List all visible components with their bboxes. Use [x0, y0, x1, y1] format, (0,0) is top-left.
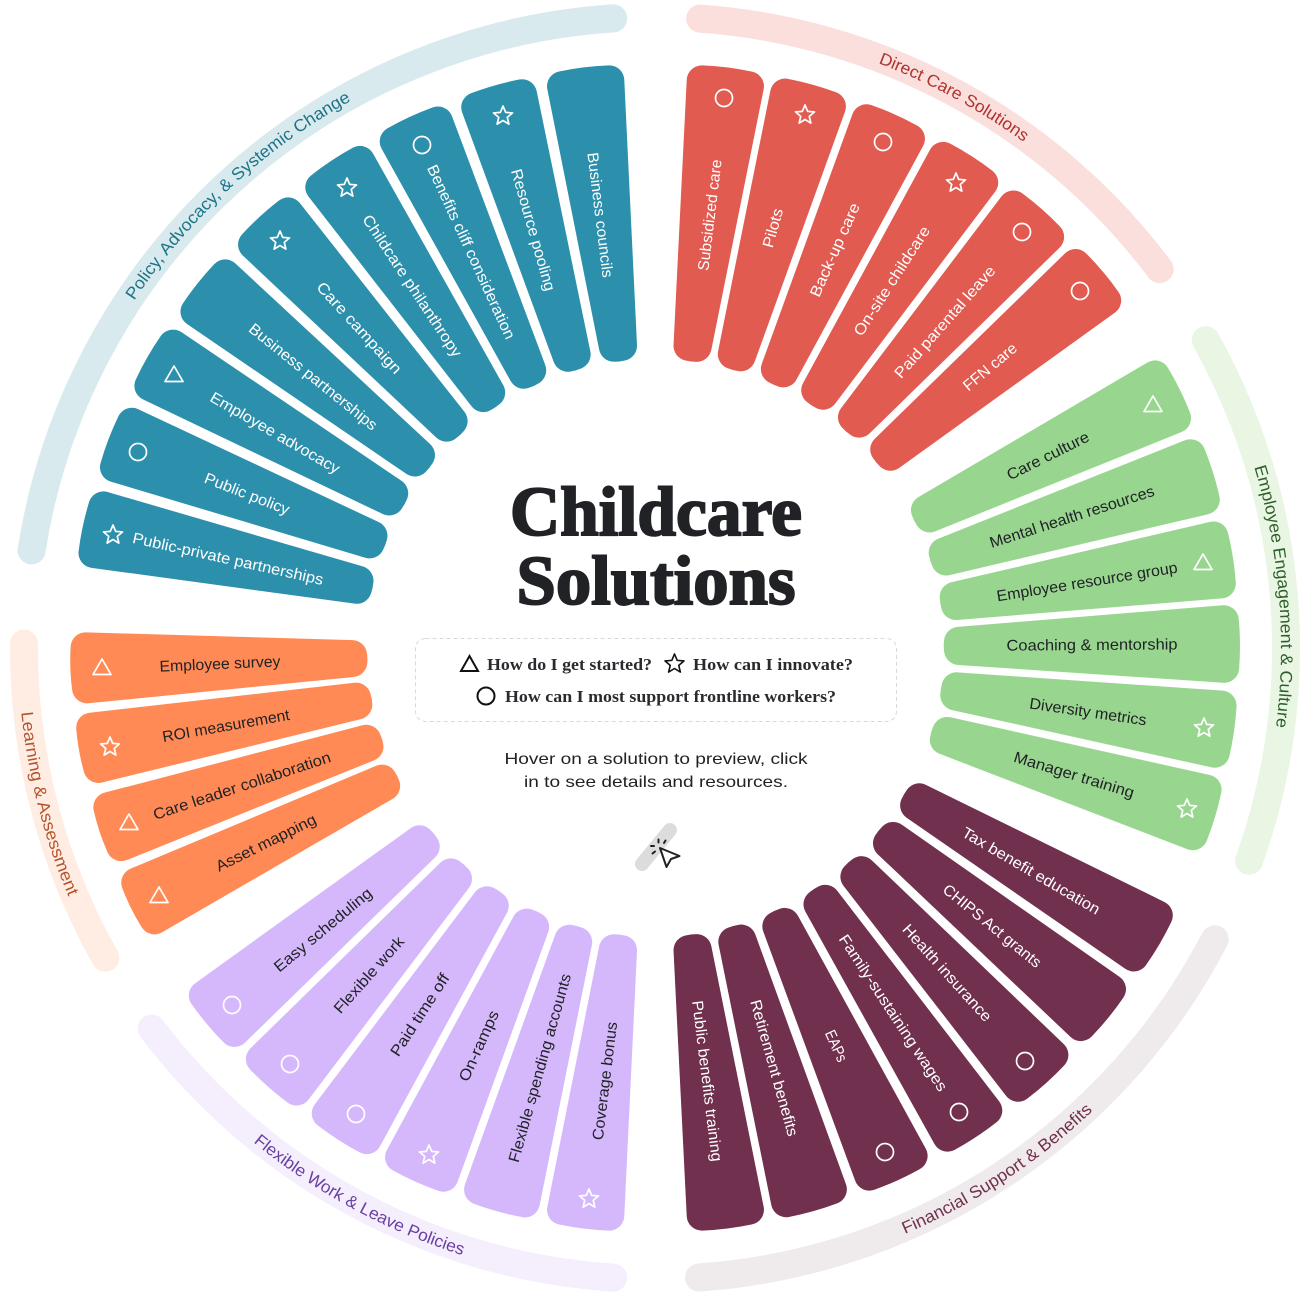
heading: Financial Support & Benefits: Financial Support & Benefits [902, 1106, 1092, 1234]
heading: Flexible Work & Leave Policies: Flexible Work & Leave Policies [254, 1134, 464, 1254]
wedge: Health insurance [841, 858, 1054, 1088]
wedge: Paid time off [326, 890, 510, 1140]
wedge: Flexible spending accounts [479, 934, 596, 1203]
wedge: Public policy: Public policy [202, 470, 292, 519]
wedge: Employee advocacy [149, 344, 403, 518]
wedge: Tax benefit education [905, 781, 1159, 957]
wedge: Mental health resources: Mental health resources [988, 483, 1157, 552]
icon: click cursor [642, 830, 680, 867]
ring: Flexible Work & Leave Policies [152, 1029, 613, 1278]
wedge: Care campaign [252, 212, 467, 440]
wedge: Asset mapping: Asset mapping [213, 811, 319, 876]
wedge: Paid parental leave [838, 205, 1050, 436]
wedge: Mental health resources [938, 454, 1206, 579]
wedge: Asset mapping [135, 764, 393, 920]
instruction text [504, 751, 809, 791]
wedge: Coverage bonus: Coverage bonus [590, 1021, 621, 1141]
heading: Direct Care Solutions: Direct Care Solutions [880, 52, 1028, 141]
wedge: Employee resource group: Employee resource group [995, 560, 1179, 605]
ring: Employee Engagement & Culture [1206, 340, 1286, 861]
wedge: Flexible work: Flexible work [331, 933, 408, 1017]
ring: Policy, Advocacy, & Systemic Change [32, 18, 613, 550]
wedge: Business partnerships: Business partnerships [245, 321, 380, 434]
wedge: Public-private partnerships [93, 506, 363, 608]
wedge: Retirement benefits: Retirement benefits [746, 998, 801, 1139]
wedge: Public policy [114, 422, 380, 562]
ring: Financial Support & Benefits [699, 939, 1215, 1278]
wedge: Retirement benefits [714, 934, 832, 1203]
wedge: Public benefits training: Public benefits training [688, 1000, 725, 1162]
wedge: Easy scheduling [203, 825, 438, 1033]
wedge: On-site childcare: On-site childcare [851, 223, 934, 339]
wedge: Childcare philanthropy [320, 160, 507, 408]
panel: Financial Support & Benefits [674, 783, 1228, 1292]
legend: How do I get started? [487, 655, 652, 674]
wedge: Care culture: Care culture [1004, 429, 1092, 484]
heading: Learning & Assessment: Learning & Assessment [21, 712, 78, 896]
panel: Employee Engagement & Culture [884, 326, 1300, 901]
wedge: Pilots: Pilots [760, 206, 787, 250]
title [510, 474, 802, 620]
wedge: Coaching & mentorship: Coaching & mentorship [1006, 636, 1178, 655]
legend: How can I most support frontline workers? [505, 687, 836, 706]
wedge: Benefits cliff consideration [394, 121, 549, 382]
wedge: Tax benefit education: Tax benefit education [959, 824, 1103, 918]
wedge: Resource pooling [476, 93, 595, 362]
wedge: Paid parental leave: Paid parental leave [891, 263, 999, 382]
legend: How can I innovate? [693, 655, 853, 674]
panel: Direct Care Solutions [674, 4, 1174, 471]
wedge: Flexible work [260, 860, 472, 1091]
heading: Policy, Advocacy, & Systemic Change: Policy, Advocacy, & Systemic Change [125, 94, 350, 300]
wedge: Benefits cliff consideration: Benefits cliff consideration [423, 162, 518, 342]
wedge: FFN care: FFN care [960, 340, 1021, 395]
wedge: Employee advocacy: Employee advocacy [207, 389, 343, 478]
wedge: Back-up care [758, 118, 910, 381]
wedge: Public-private partnerships: Public-private partnerships [131, 530, 325, 589]
wedge: Health insurance: Health insurance [898, 921, 995, 1025]
panel: Learning & Assessment [10, 630, 400, 972]
wedge: Public benefits training [669, 946, 749, 1217]
wedge: Pilots [714, 93, 831, 362]
wedge: On-ramps [400, 915, 552, 1178]
wedge: Employee survey: Employee survey [159, 653, 281, 676]
wedge: On-site childcare [800, 156, 984, 406]
wedge: Care culture [917, 375, 1177, 535]
wedge: Employee survey [85, 638, 353, 688]
wedge: Coaching & mentorship [959, 620, 1225, 670]
wedge: Family-sustaining wages: Family-sustaining wages [835, 932, 950, 1095]
instruction text: Hover on a solution to preview, click [504, 751, 809, 768]
wedge: Manager training: Manager training [1012, 749, 1136, 802]
wedge: Diversity metrics [952, 668, 1223, 753]
wedge: Care campaign: Care campaign [313, 279, 405, 378]
wedge: Manager training [939, 713, 1208, 836]
wedge: Business councils [562, 79, 642, 349]
ring: Learning & Assessment [24, 644, 105, 958]
instruction text: in to see details and resources. [524, 774, 788, 791]
wedge: EAPs: EAPs [821, 1028, 850, 1065]
wedge: EAPs [759, 915, 913, 1177]
title: Childcare [510, 474, 802, 551]
wedge: FFN care [872, 263, 1107, 471]
wedge: Back-up care: Back-up care [807, 201, 864, 300]
wedge: Business partnerships [195, 274, 432, 477]
wedge: Coverage bonus [562, 947, 642, 1217]
wedge: Subsidized care [669, 79, 749, 350]
wedge: ROI measurement [90, 681, 361, 768]
wedge: CHIPS Act grants: CHIPS Act grants [939, 881, 1045, 972]
wedge: Business councils: Business councils [583, 151, 616, 279]
wedge: Subsidized care: Subsidized care [695, 158, 726, 272]
legend [416, 638, 896, 722]
ring: Direct Care Solutions [700, 19, 1160, 269]
wedge: Easy scheduling: Easy scheduling [271, 885, 376, 976]
heading: Employee Engagement & Culture: Employee Engagement & Culture [1254, 465, 1293, 728]
wedge: On-ramps: On-ramps [456, 1008, 503, 1084]
wedge: Care leader collaboration: Care leader collaboration [151, 749, 333, 824]
wedge: Care leader collaboration [107, 724, 374, 846]
title: Solutions [516, 543, 796, 620]
wedge: Resource pooling: Resource pooling [507, 167, 558, 293]
wedge: Paid time off: Paid time off [387, 970, 454, 1060]
wedge: Childcare philanthropy: Childcare philanthropy [358, 212, 465, 361]
wedge: ROI measurement: ROI measurement [161, 707, 292, 746]
wedge: Employee resource group [951, 536, 1222, 625]
wedge: Flexible spending accounts: Flexible spending accounts [506, 972, 575, 1164]
panel: Flexible Work & Leave Policies [138, 825, 637, 1292]
panel: Policy, Advocacy, & Systemic Change [18, 4, 637, 604]
wedge: Family-sustaining wages [802, 889, 988, 1137]
wedge: CHIPS Act grants [875, 822, 1112, 1027]
wedge: Diversity metrics: Diversity metrics [1028, 696, 1148, 729]
